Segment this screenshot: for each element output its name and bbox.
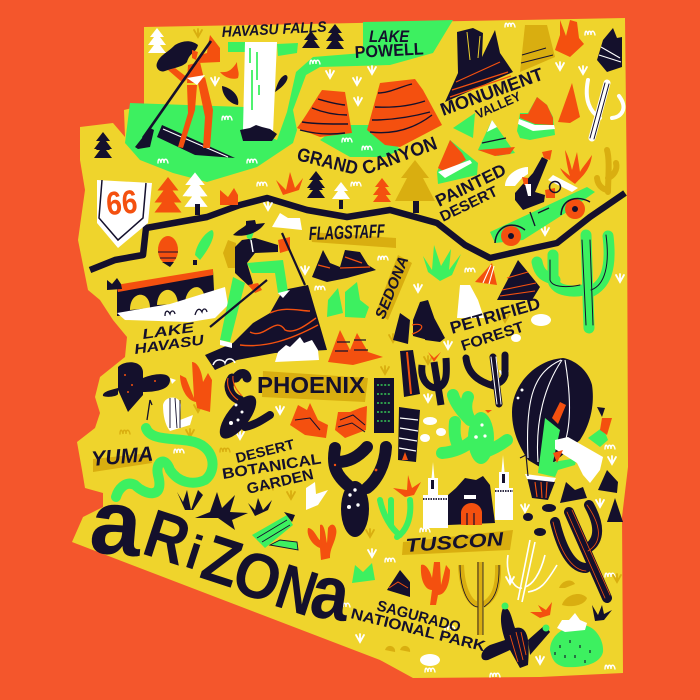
large green saguaro (537, 235, 609, 328)
text: National Park: NATIONAL PARK (349, 605, 487, 655)
icon: pine tree, white canyon (332, 182, 350, 199)
jeep with driver (490, 150, 595, 246)
green cactus (442, 395, 507, 464)
text: Sedona: SEDONA (372, 254, 412, 321)
road: route 66 (90, 193, 625, 270)
sedona rocks (393, 300, 445, 344)
icon: pine tree, white large (182, 172, 208, 207)
navy tuft (592, 605, 612, 621)
painted hills (437, 83, 580, 184)
text: Monument: MONUMENT (438, 64, 546, 120)
icon: pine tree, orange canyon (373, 178, 391, 202)
mustard butte (520, 25, 555, 72)
orange agave (560, 150, 592, 184)
orange cactus tuscon (421, 562, 450, 605)
white scarf (555, 437, 603, 483)
icon: pine tree, navy small (302, 31, 320, 48)
trees (94, 24, 391, 215)
skyscraper (374, 378, 394, 433)
body (235, 238, 278, 287)
title: Arizona: a (86, 470, 147, 576)
balloon small: orange (158, 236, 178, 267)
white saguaro (587, 80, 623, 139)
text: Grand: GRAND (295, 144, 360, 180)
green cactus under Tuscon left (380, 500, 410, 537)
rock (205, 285, 327, 370)
orange cactus (180, 362, 212, 412)
hot air balloon with couple (512, 358, 612, 500)
white cactus with stripes (163, 398, 193, 431)
navy hill (387, 570, 410, 597)
orange tuft (530, 602, 552, 618)
face (246, 232, 254, 240)
legs (220, 260, 288, 342)
orange tuft (220, 172, 303, 205)
text: Phoenix strip (262, 371, 368, 402)
icon: pine tree, orange (154, 177, 182, 212)
icon: route 66 shield (97, 180, 152, 248)
orange rock (555, 20, 584, 57)
text: Tuscon strip (402, 530, 513, 555)
text: Forest: FOREST (459, 319, 526, 355)
dark rocks near balloon (523, 470, 623, 536)
white blobs (420, 314, 551, 666)
monument valley butte (445, 28, 513, 102)
green pad (193, 230, 214, 265)
agave navy (195, 492, 248, 530)
text: Lake: LAKE (369, 27, 410, 46)
green hills (327, 282, 369, 318)
text: Phoenix: PHOENIX (257, 372, 366, 398)
petrified column (400, 350, 420, 397)
navy cactus with flower (422, 352, 446, 405)
orange cactus small (308, 525, 336, 560)
navy striped cactus (481, 602, 550, 668)
decorative grass marks, white (158, 23, 624, 677)
text: Flagstaff: FLAGSTAFF (308, 221, 386, 245)
sedona strip (376, 255, 412, 320)
green barrel cactus (252, 512, 298, 550)
title: Arizona: Z (194, 520, 251, 601)
title: Arizona: O (225, 535, 291, 618)
icon: pine tree, navy tall (326, 24, 344, 49)
passenger (538, 418, 577, 477)
mustard cactus (597, 150, 616, 192)
icon: white snowy peak (272, 213, 302, 230)
stone bridge (116, 269, 228, 322)
mustard outlined cactus (460, 562, 499, 635)
navy-orange cactus (213, 374, 270, 444)
navy cactus left (103, 362, 176, 412)
navy-white cactus (466, 355, 505, 404)
grand canyon rock: left (297, 90, 352, 137)
crown tuft (107, 278, 122, 290)
text: Tuscon: TUSCON (405, 529, 506, 557)
title: Arizona: a (306, 549, 356, 638)
mustard pads (385, 581, 587, 652)
mission church (423, 455, 513, 528)
green small hill (352, 563, 375, 583)
text: Yuma strip (93, 453, 152, 472)
title: Arizona (86, 470, 356, 638)
text: Yuma: YUMA (90, 443, 154, 471)
green round cactus (550, 613, 603, 667)
snake (116, 400, 213, 497)
balloon basket (527, 477, 555, 500)
text: Canyon: CANYON (360, 133, 440, 180)
poles (210, 233, 305, 327)
white outline cactus (507, 540, 557, 602)
text: Lake: LAKE (141, 319, 196, 342)
text: Powell: POWELL (354, 39, 424, 62)
flagstaff strip (310, 232, 396, 248)
title: Arizona: N (268, 550, 326, 630)
green lake and river (125, 20, 453, 182)
hiker on rock (205, 220, 327, 370)
text: Painted: PAINTED (432, 160, 509, 211)
text: Havasu: HAVASU (133, 331, 206, 357)
mustard tree (395, 160, 435, 213)
white cactus (306, 482, 328, 510)
text: Petrified: PETRIFIED (448, 294, 542, 338)
white cactus striped base (457, 285, 484, 318)
flagstaff rocks (312, 250, 376, 282)
text: Valley: VALLEY (473, 88, 523, 122)
orange striped rocks (328, 330, 383, 365)
hat (233, 220, 265, 236)
agave green (423, 245, 461, 281)
orange tuft top (220, 62, 239, 79)
striped building (398, 407, 420, 462)
paddleboarder (135, 35, 235, 158)
text: Havasu Falls: HAVASU FALLS (221, 19, 327, 41)
text: Desert: DESERT (234, 436, 296, 466)
text: Garden: GARDEN (245, 466, 315, 498)
icon: pine tree, navy, left (94, 132, 112, 158)
title: Arizona: i (180, 526, 209, 581)
text: Botanical: BOTANICAL (221, 451, 322, 483)
shield number: 66 (105, 183, 139, 222)
text: Sagurado: SAGURADO (375, 597, 463, 636)
icon: pine tree, navy grand canyon (307, 171, 325, 198)
navy saguaro (553, 505, 610, 598)
big navy cactus (334, 447, 386, 537)
orange agave (393, 475, 421, 497)
icon: pine tree, white (148, 28, 166, 53)
grand canyon rock: right (367, 79, 442, 147)
map of Arizona (72, 18, 628, 678)
title: Arizona: R (135, 495, 199, 580)
striped hills (475, 260, 540, 300)
navy tufts (177, 490, 272, 516)
waterfall (228, 42, 298, 141)
orange striped rock pair (290, 403, 367, 438)
navy rock (597, 28, 622, 72)
icons: dark leaves near waterfall (222, 75, 288, 105)
backpack (223, 240, 236, 268)
text: Desert: DESERT (437, 183, 500, 226)
decorative grass marks, mustard and orange (120, 29, 621, 582)
